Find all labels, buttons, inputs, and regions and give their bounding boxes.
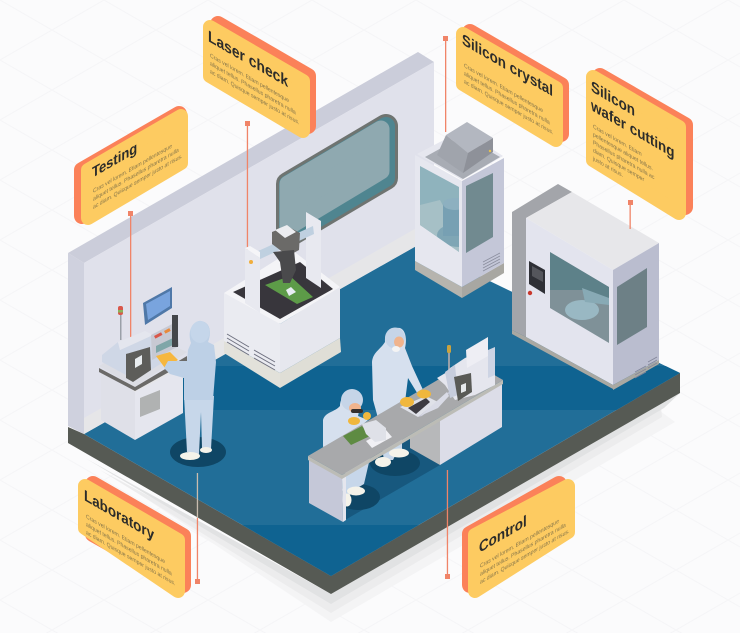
seated technician at desk — [323, 389, 370, 506]
card: Testing — [82, 114, 183, 218]
body text: Silicon wafer cutting — [592, 124, 654, 184]
body text: Silicon wafer cutting: Cras vel lorem. Etiam — [593, 124, 642, 158]
body text: Laboratory: Cras vel lorem. Etiam pellentesque — [86, 514, 165, 566]
laser check machine — [224, 212, 341, 388]
heading: Control: Control — [479, 512, 527, 557]
floor platform — [60, 245, 700, 594]
body text: Laboratory: ac diam. Quisque semper justo at risus. — [86, 530, 176, 588]
heading: Laser check: Laser check — [208, 28, 288, 91]
silicon wafer cutting machine — [512, 184, 659, 390]
body text: Silicon wafer cutting: pellentesque aliquet tellus. — [593, 132, 653, 173]
card: Silicon wafer cutting: wafer cutting — [590, 96, 674, 162]
body text: Laser check: ac diam. Quisque semper justo at risus. — [210, 69, 300, 127]
connector line: laser check — [245, 121, 250, 250]
desk instrument — [437, 337, 495, 401]
connector line: laboratory — [195, 473, 200, 584]
card: Laboratory — [84, 484, 183, 591]
laptop — [400, 390, 450, 417]
card: Silicon wafer cutting — [590, 76, 685, 213]
silicon crystal machine — [415, 122, 504, 298]
standing technician at desk — [372, 328, 424, 467]
body text: Testing: ac diam. Quisque semper justo at risus. — [93, 153, 183, 211]
window — [288, 126, 386, 236]
standing technician — [164, 321, 226, 467]
heading: Laboratory: Laboratory — [84, 487, 154, 545]
connector line: testing — [128, 211, 133, 344]
body text: Control: Cras vel lorem. Etiam pellentesque — [480, 518, 559, 570]
body text: Control: ac diam. Quisque semper justo at risus. — [480, 528, 570, 586]
body text: Silicon crystal: aliquet tellus. Phasellus pharetra nulla — [464, 71, 550, 127]
connector line: silicon wafer cutting — [628, 200, 633, 229]
floor shadow — [85, 393, 680, 622]
body text: Silicon crystal: Cras vel lorem. Etiam pellentesque — [464, 63, 543, 115]
card: Laser check — [208, 24, 308, 131]
body text: Testing: Cras vel lorem. Etiam pellentesque — [93, 143, 172, 195]
body text: Silicon wafer cutting: diam. Quisque semper — [593, 148, 644, 184]
connector line: control — [445, 470, 450, 579]
body text: Testing: aliquet tellus. Phasellus pharetra nulla — [93, 147, 179, 203]
gloves and goggles — [348, 409, 371, 425]
body text: Laboratory: aliquet tellus. Phasellus pharetra nulla — [86, 522, 172, 578]
body text: Silicon crystal: ac diam. Quisque semper justo at risus. — [464, 79, 554, 137]
pcb and microscope — [343, 420, 392, 448]
testing machine — [99, 287, 187, 440]
back wall — [68, 52, 434, 434]
body text: Laser check: Cras vel lorem. Etiam pellentesque — [210, 53, 289, 105]
card: Silicon crystal — [462, 31, 561, 140]
card: Control — [470, 484, 570, 591]
control desk with technicians — [308, 328, 503, 522]
connector line: silicon crystal — [443, 36, 448, 132]
heading: Silicon crystal: Silicon crystal — [462, 31, 553, 101]
body text: Silicon wafer cutting: justo at risus. — [592, 155, 623, 179]
heading: Silicon wafer cutting: Silicon — [591, 78, 635, 120]
heading: Testing: Testing — [92, 139, 137, 182]
body text: Control: aliquet tellus. Phasellus pharetra nulla — [480, 522, 566, 578]
body text: Laser check: aliquet tellus. Phasellus pharetra nulla — [210, 61, 296, 117]
body text: Silicon wafer cutting: Phasellus pharetra nulla ac — [593, 140, 654, 181]
